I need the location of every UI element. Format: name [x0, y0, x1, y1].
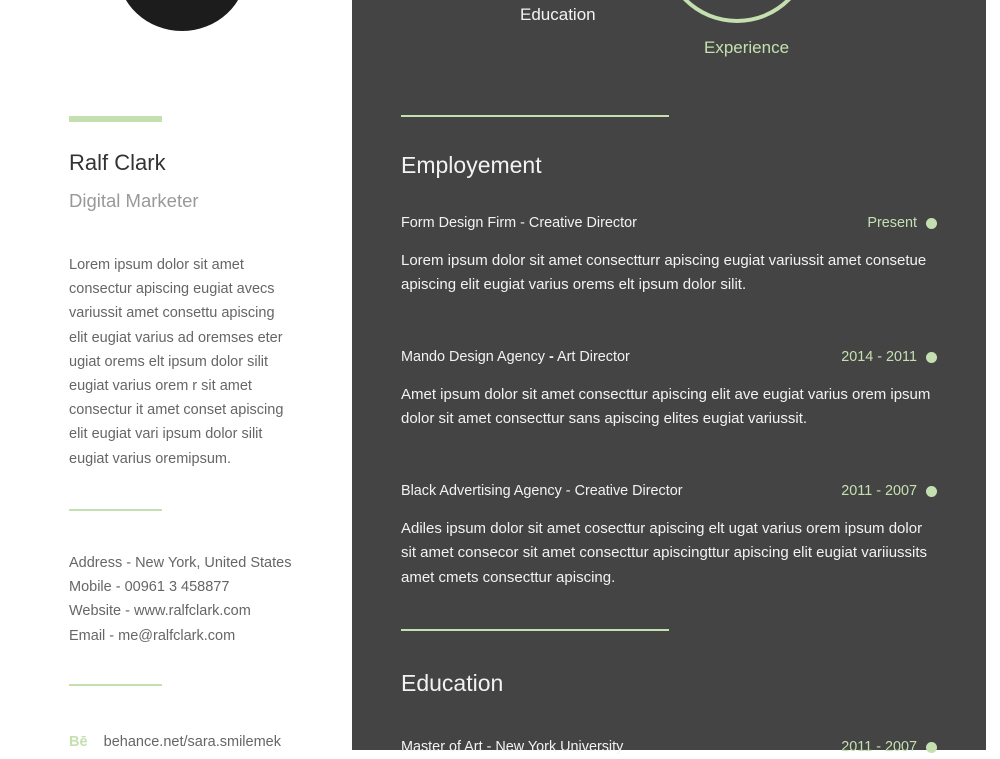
job 1: Lorem ipsum dolor sit amet consectturr apiscing eugiat variussit amet consetue — [401, 252, 926, 269]
chart remnant — [662, 0, 812, 23]
contact info: Address - New York, United States — [69, 555, 291, 571]
contact info: Mobile - 00961 3 458877 — [69, 579, 229, 595]
bio: elit eugiat varius ad oremses eter — [69, 330, 283, 346]
bio: variussit amet consettu apiscing — [69, 305, 275, 321]
bio: elit eugiat vari ipsum dolor silit — [69, 426, 262, 442]
bio: Lorem ipsum dolor sit amet — [69, 257, 244, 273]
job 1: Present — [867, 215, 917, 231]
bio — [69, 257, 283, 467]
job 3: Adiles ipsum dolor sit amet cosecttur apiscing elt ugat varius orem ipsum dolor — [401, 520, 922, 537]
heading: education: Education — [401, 670, 503, 696]
job 3: 2011 - 2007 — [841, 483, 917, 499]
education item: Master of Art - New York University — [401, 739, 623, 755]
bio: eugiat varius oremipsum. — [69, 451, 231, 467]
education item — [401, 739, 937, 755]
bio: ugiat orems elt ipsum dolor silit — [69, 354, 268, 370]
photo — [118, 0, 246, 31]
job 1 — [401, 215, 937, 293]
bio: consectur it amet conset apiscing — [69, 402, 283, 418]
contact info — [69, 555, 291, 644]
bio: consectur apiscing eugiat avecs — [69, 281, 275, 297]
chart label: experience: Experience — [704, 38, 789, 57]
heading: employment: Employement — [401, 152, 542, 178]
job 2: dolor sit amet consecttur sans apiscing elites eugiat variussit. — [401, 410, 807, 427]
bio: eugiat varius orem r sit amet — [69, 378, 252, 394]
right panel — [352, 0, 986, 750]
job 2: 2014 - 2011 — [841, 349, 917, 365]
job title: Digital Marketer — [69, 190, 199, 211]
chart label: education: Education — [520, 5, 596, 24]
job 1: Form Design Firm - Creative Director — [401, 215, 637, 231]
job 3: amet cmets consecttur apiscing. — [401, 569, 615, 586]
job 3: sit amet consecor sit amet consecttur apiscingttur apiscing elit eugiat variiussits — [401, 544, 927, 561]
job 1: apiscing elit eugiat varius orems elt ipsum dolor silit. — [401, 276, 746, 293]
job 2 — [401, 349, 937, 427]
job 3: Black Advertising Agency - Creative Director — [401, 483, 683, 499]
accent bar — [69, 116, 162, 122]
job 2: Amet ipsum dolor sit amet consecttur apiscing elit ave eugiat varius orem ipsum — [401, 386, 930, 403]
contact info: Email - me@ralfclark.com — [69, 628, 235, 644]
job 3 — [401, 483, 937, 586]
name: Ralf Clark — [69, 150, 166, 175]
job 2: Mando Design Agency - Art Director — [401, 349, 630, 365]
contact info: Website - www.ralfclark.com — [69, 603, 251, 619]
behance link: Bē behance.net/sara.smilemek — [69, 734, 281, 750]
education item: 2011 - 2007 — [841, 739, 917, 755]
